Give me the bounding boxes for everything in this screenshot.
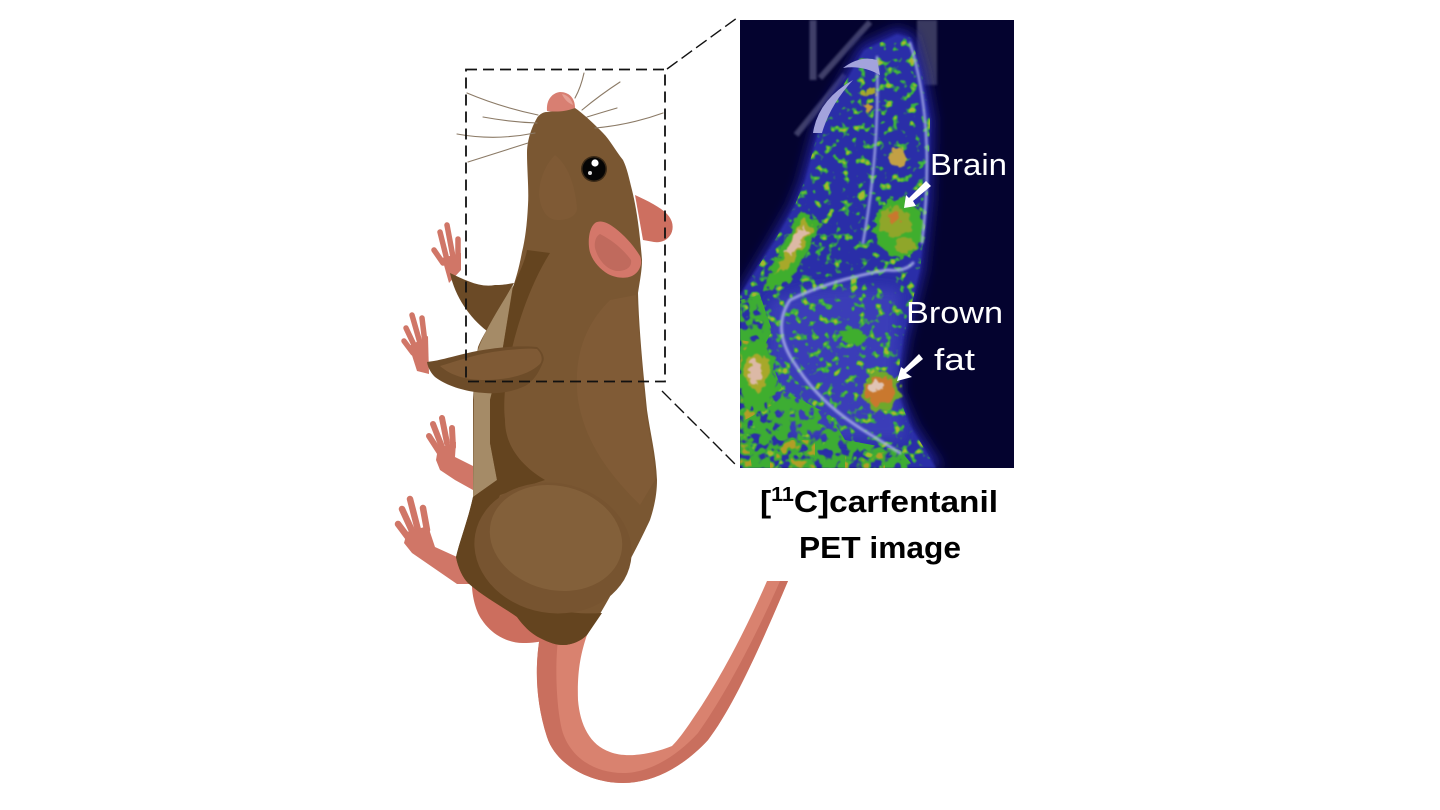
haunch skin (472, 578, 546, 643)
body (456, 108, 657, 645)
caption line 1: 11 (771, 484, 794, 506)
haunch (464, 470, 642, 626)
caption line 2: PET image (799, 530, 961, 565)
eye (581, 156, 607, 182)
mouse illustration (398, 73, 788, 783)
label: fat: fat (934, 342, 975, 377)
skull crescents (813, 59, 880, 133)
arrow: to brown fat (897, 354, 923, 381)
whiskers (457, 73, 663, 162)
arc highlight lines (781, 43, 927, 453)
label: Brain: Brain (930, 147, 1007, 182)
brown fat hotspot (862, 371, 900, 411)
arrow: to brain (904, 181, 931, 208)
mouse tail (537, 581, 788, 783)
dense uptake zones (740, 295, 915, 468)
zoom frame: dashed rectangle (466, 70, 665, 382)
PET background (740, 20, 1014, 468)
far ear (635, 195, 673, 242)
nose (547, 92, 575, 112)
lighter back (577, 295, 655, 505)
upper front paw (434, 225, 461, 283)
face patch (539, 155, 577, 220)
belly (473, 285, 513, 497)
upper arm (450, 273, 514, 331)
body halo (740, 28, 943, 468)
PET image panel (739, 20, 1014, 468)
near ear (589, 222, 641, 278)
dark flank (456, 250, 602, 645)
hind paw (398, 499, 470, 584)
CT bed shapes (796, 20, 927, 135)
caption line 1: C]carfentanil (794, 484, 998, 519)
lower patch (840, 329, 866, 345)
lower front paw (404, 315, 429, 374)
lighter blue centre (768, 287, 905, 440)
label: Brown: Brown (906, 295, 1003, 330)
caption (760, 484, 998, 565)
zoom connector lines (662, 18, 737, 466)
mouse body in blue (740, 34, 936, 468)
front arm (427, 346, 544, 393)
hot regions (739, 88, 924, 411)
shoulder stripe hotspot (762, 210, 822, 290)
back left paw (429, 418, 473, 490)
caption line 1: [ (760, 484, 770, 519)
speckled uptake (740, 34, 936, 468)
left limb hotspot (739, 339, 775, 411)
brain hotspot (863, 88, 924, 257)
